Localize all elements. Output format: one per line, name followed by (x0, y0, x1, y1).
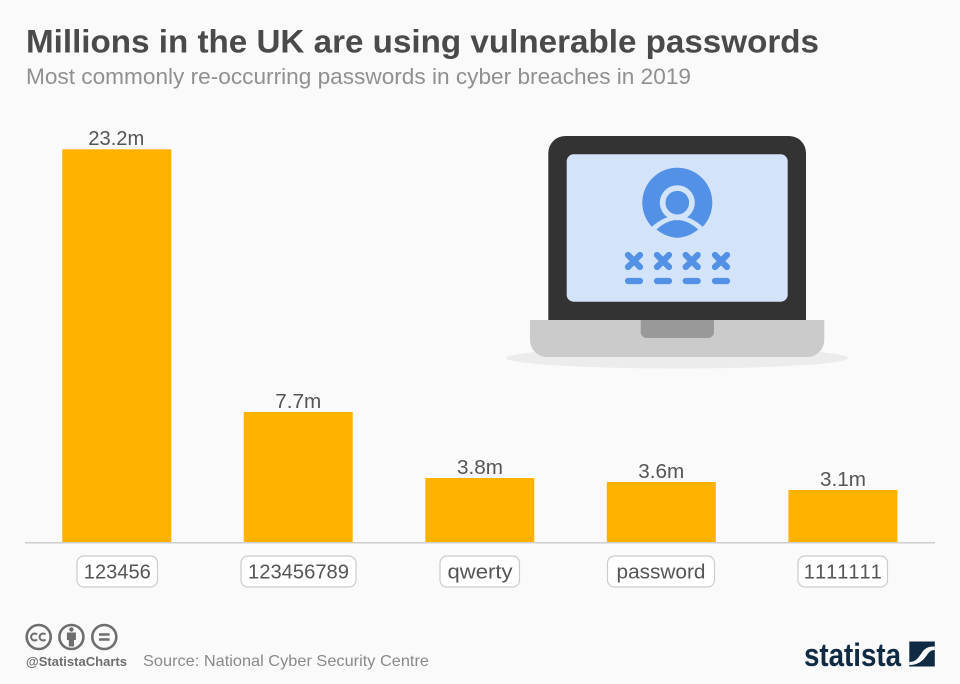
icon: creative commons licence (27, 625, 116, 649)
bar: 1111111: 3.1m (820, 469, 866, 491)
bar: password: 3.6m (638, 461, 684, 483)
source: Source: National Cyber Security Centre (143, 653, 429, 670)
credit handle: @StatistaCharts (26, 655, 127, 669)
category label: 123456789 (241, 556, 356, 587)
bar chart (25, 128, 935, 544)
title: Millions in the UK are using vulnerable passwords (26, 24, 819, 60)
category label: qwerty (440, 556, 520, 587)
category label: qwerty: qwerty (448, 562, 512, 584)
statista logo: statista (804, 637, 901, 673)
category label: password (608, 556, 714, 587)
icon: statista mark (909, 642, 935, 666)
icon: laptop with login screen (506, 136, 848, 368)
bar: password (607, 461, 716, 543)
category label: 123456: 123456 (84, 562, 151, 584)
bar: 1111111 (788, 469, 897, 543)
bar: 123456: 23.2m (88, 128, 144, 150)
bar: 123456 (62, 128, 171, 543)
bar: qwerty: 3.8m (457, 457, 503, 479)
category label: 1111111: 1111111 (804, 562, 882, 584)
category label: 1111111 (798, 556, 888, 587)
category label: 123456789: 123456789 (248, 562, 349, 584)
category label: 123456 (77, 556, 158, 587)
subtitle: Most commonly re-occurring passwords in cyber breaches in 2019 (26, 64, 691, 89)
bar: 123456789 (244, 391, 353, 543)
bar: 123456789: 7.7m (275, 391, 321, 413)
icon: password characters (628, 255, 727, 281)
icon: user avatar (642, 168, 712, 245)
bar: qwerty (425, 457, 534, 543)
category label: password: password (616, 562, 706, 584)
